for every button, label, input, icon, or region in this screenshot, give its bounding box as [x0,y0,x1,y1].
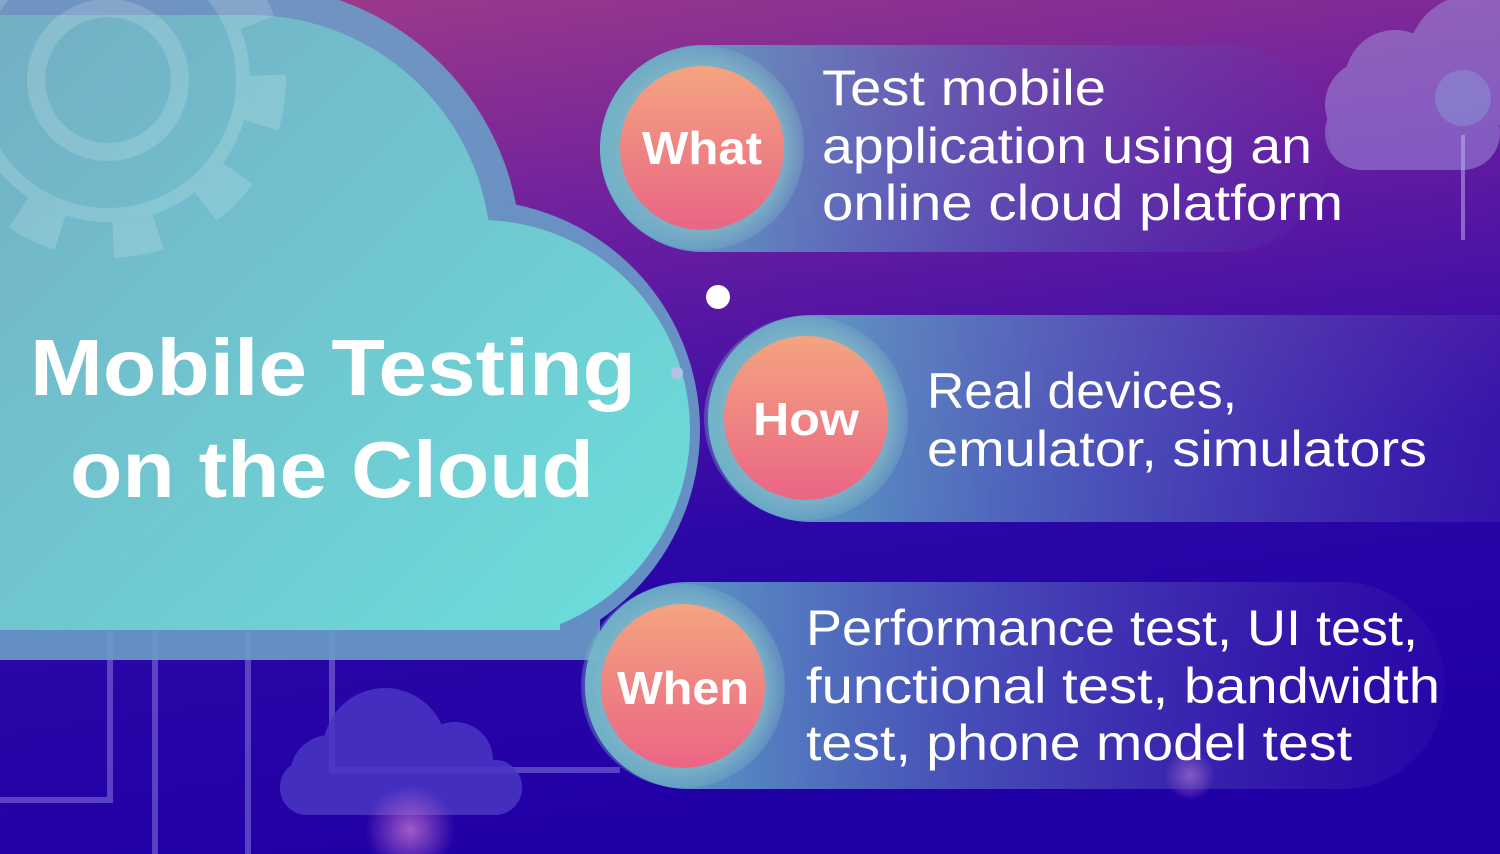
panel: when: Performance test, UI test, [806,600,1418,656]
panel: when: test, phone model test [806,715,1352,771]
title [30,323,636,514]
panel: when: functional test, bandwidth [806,658,1440,714]
panel: how: How [753,393,859,445]
glow [365,785,455,854]
main cloud [0,0,700,660]
small bottom cloud [280,688,522,815]
title: Mobile Testing [30,323,636,412]
panel: what: online cloud platform [822,175,1343,231]
panel: how [704,315,1500,522]
dots [706,285,730,309]
top-right cloud [1325,0,1500,240]
panel: what: Test mobile [822,60,1106,116]
panel: when [581,582,1445,789]
panel: what: application using an [822,118,1312,174]
panel: how: emulator, simulators [927,421,1427,477]
panel: how: Real devices, [927,363,1237,419]
panel: what [600,45,1343,252]
title: on the Cloud [70,425,594,514]
icon: gear [0,0,268,240]
panel: when: When [617,662,749,714]
panel: what: What [642,122,762,174]
circuit lines [0,620,620,854]
